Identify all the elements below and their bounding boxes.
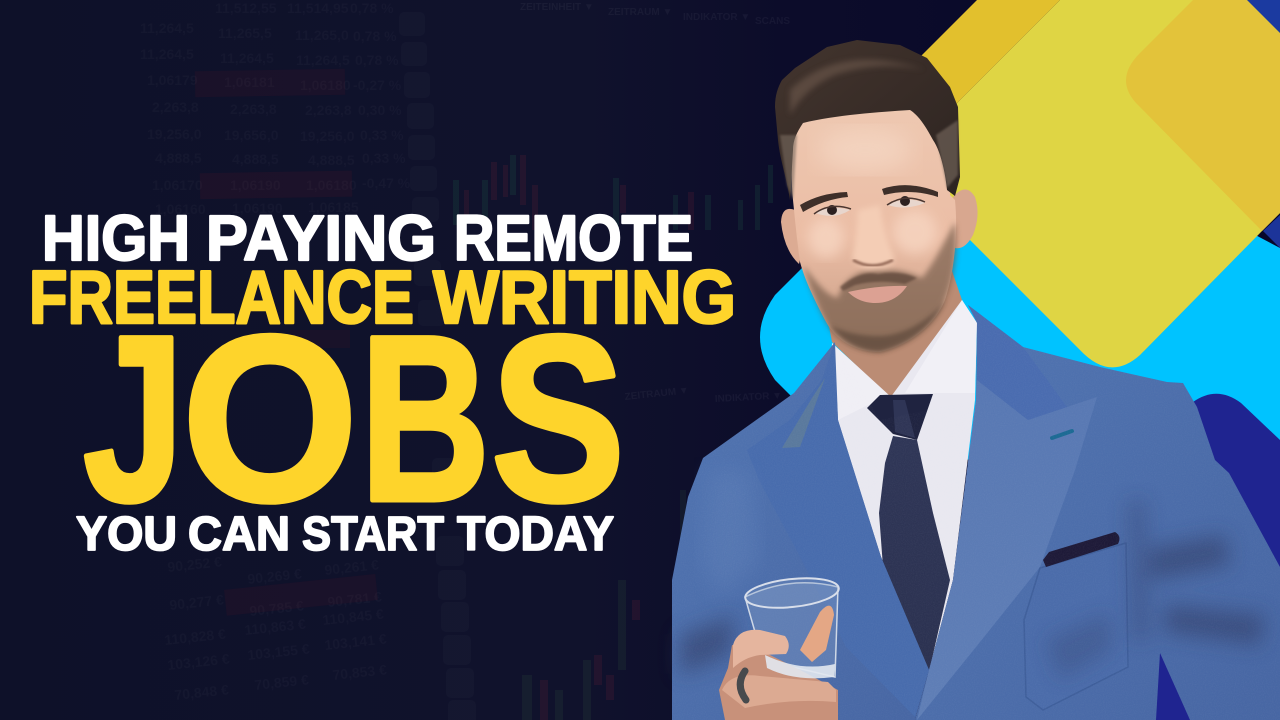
beard bbox=[803, 222, 956, 352]
right eye bbox=[887, 196, 925, 208]
mouth bbox=[848, 286, 907, 303]
left collar bbox=[782, 378, 825, 448]
heading line 1: HIGH bbox=[42, 202, 190, 274]
heading line 4: YOU bbox=[76, 508, 177, 561]
navy gap under arm bbox=[1156, 653, 1190, 720]
table numbers: 1,06160 bbox=[155, 201, 206, 217]
forehead highlight bbox=[817, 128, 913, 172]
table numbers: 110,863 € bbox=[244, 616, 307, 638]
table numbers: 103,126 € bbox=[167, 651, 230, 673]
table numbers: 11,264,5 bbox=[140, 46, 194, 62]
table numbers: 19,256,0 bbox=[147, 126, 202, 142]
table numbers: 1,06180 bbox=[300, 77, 351, 93]
left eye bbox=[814, 205, 851, 216]
glass base bbox=[765, 655, 835, 678]
table numbers: -0,27 % bbox=[353, 77, 402, 93]
glass and hand bbox=[719, 574, 840, 720]
heading line 1: REMOTE bbox=[454, 202, 693, 274]
man in blue suit bbox=[660, 40, 1280, 720]
shirt bbox=[830, 300, 977, 670]
chart tabs: ZEITEINHEIT ▼ bbox=[520, 2, 594, 13]
table numbers: 1,06185 bbox=[308, 199, 359, 215]
table highlight rows bbox=[195, 69, 378, 616]
heading line 4: START bbox=[302, 508, 444, 561]
table numbers: 90,252 € bbox=[167, 553, 223, 575]
left sleeve highlight bbox=[700, 470, 760, 600]
ring bbox=[740, 671, 746, 700]
heading line 3: B bbox=[360, 287, 490, 551]
table numbers: 11,264,5 bbox=[140, 20, 194, 36]
hair bbox=[775, 40, 960, 200]
table numbers: 90,277 € bbox=[169, 591, 225, 613]
lapel buttonhole bbox=[1052, 431, 1072, 438]
ear right bbox=[953, 190, 978, 248]
cheek highlights bbox=[808, 210, 937, 258]
table numbers: 11,265,5 bbox=[218, 25, 272, 41]
table numbers: 90,261 € bbox=[324, 556, 380, 578]
table numbers: 90,269 € bbox=[247, 565, 303, 587]
table numbers: 11,264,5 bbox=[220, 50, 274, 66]
table numbers: 0,33 % bbox=[362, 150, 406, 166]
table numbers: 0,78 % bbox=[353, 28, 397, 44]
hand bbox=[719, 606, 838, 720]
chart tabs: ZEITRAUM ▼ bbox=[624, 385, 689, 403]
table numbers: -0,47 % bbox=[362, 175, 411, 191]
chart tabs: ZEITRAUM ▼ bbox=[608, 7, 672, 18]
table numbers: 11,514,95 bbox=[287, 0, 349, 16]
heading line 3: O bbox=[182, 287, 358, 551]
table numbers: 11,512,55 bbox=[215, 0, 277, 16]
fabric shadows bbox=[680, 500, 1265, 680]
right collar bbox=[968, 305, 1067, 420]
table numbers: 103,155 € bbox=[247, 641, 310, 663]
table numbers: 2,263,8 bbox=[305, 102, 352, 118]
shape: yellow diamond bbox=[895, 0, 1280, 367]
table numbers: 1,06190 bbox=[232, 200, 283, 216]
table numbers: 1,06190 bbox=[230, 177, 281, 193]
table numbers: 110,845 € bbox=[322, 606, 385, 628]
lower finger bbox=[722, 675, 836, 708]
table numbers: 70,853 € bbox=[332, 661, 388, 683]
chest pocket bbox=[1024, 543, 1128, 710]
shape: navy top corner bbox=[1247, 0, 1280, 33]
table numbers: 11,265,0 bbox=[295, 27, 349, 43]
moustache bbox=[840, 273, 917, 291]
table numbers: 4,888,5 bbox=[308, 152, 355, 168]
shape: dark yellow band bbox=[812, 0, 1060, 165]
chart candles bbox=[453, 155, 773, 720]
table numbers: 1,06181 bbox=[224, 74, 275, 90]
table numbers: 1,06180 bbox=[306, 177, 357, 193]
chart tabs: INDIKATOR ▼ bbox=[715, 390, 782, 405]
shirt collar bbox=[832, 300, 977, 420]
ear left bbox=[781, 209, 805, 264]
table numbers: 4,888,5 bbox=[155, 150, 202, 166]
thumb bbox=[800, 606, 834, 662]
neck bbox=[826, 265, 962, 398]
heading line 2: WRITING bbox=[433, 255, 736, 339]
heading line 3: J bbox=[83, 287, 184, 551]
table numbers: 2,263,8 bbox=[230, 101, 277, 117]
decorative shapes bbox=[760, 0, 1280, 720]
right lapel bbox=[917, 380, 1097, 720]
shape: cyan blob bbox=[760, 100, 1280, 470]
table numbers: 103,141 € bbox=[324, 631, 387, 653]
fabric texture bbox=[874, 390, 1115, 630]
table numbers: 0,33 % bbox=[360, 127, 404, 143]
table numbers: 19,656,0 bbox=[224, 127, 279, 143]
pocket square bbox=[1043, 532, 1119, 567]
heading line 4: CAN bbox=[188, 508, 290, 561]
shape: navy small triangle bbox=[1263, 215, 1280, 248]
table numbers: 1,06170 bbox=[152, 177, 203, 193]
table numbers: 70,859 € bbox=[254, 671, 310, 693]
table numbers: 2,263,8 bbox=[152, 99, 199, 115]
left lapel bbox=[747, 344, 929, 717]
face bbox=[792, 95, 956, 352]
table numbers: 70,848 € bbox=[174, 681, 230, 703]
headline bbox=[29, 202, 736, 561]
index finger bbox=[733, 630, 789, 668]
heading line 1: PAYING bbox=[206, 202, 436, 274]
suit jacket bbox=[660, 300, 1280, 720]
nose bbox=[852, 205, 894, 269]
right eyebrow bbox=[882, 185, 938, 197]
table numbers: 90,781 € bbox=[327, 588, 383, 610]
chart tabs: SCANS bbox=[755, 16, 790, 27]
table numbers bbox=[140, 0, 411, 703]
table numbers: 90,785 € bbox=[249, 597, 305, 619]
table numbers: 0,78 % bbox=[355, 52, 399, 68]
table numbers: 1,06179 bbox=[147, 72, 198, 88]
table numbers: 0,30 % bbox=[358, 102, 402, 118]
chart tabs: INDIKATOR ▼ bbox=[683, 12, 750, 23]
left eyebrow bbox=[800, 192, 848, 212]
table numbers: 11,264,5 bbox=[296, 52, 350, 68]
heading line 4: TODAY bbox=[457, 508, 614, 561]
glass bbox=[744, 574, 840, 677]
chart toolbar bbox=[399, 12, 476, 720]
heading line 3: S bbox=[491, 287, 625, 551]
tie bbox=[867, 394, 950, 672]
shape: navy diamond bbox=[1100, 394, 1280, 720]
table numbers: 0,78 % bbox=[350, 0, 394, 16]
table numbers: 4,888,5 bbox=[232, 151, 279, 167]
table numbers: 110,828 € bbox=[164, 626, 227, 648]
shape: amber rounded square bbox=[1126, 0, 1280, 231]
chart tabs bbox=[520, 2, 790, 405]
heading line 2: FREELANCE bbox=[29, 255, 414, 339]
table numbers: 19,256,0 bbox=[300, 128, 355, 144]
head bbox=[775, 40, 978, 352]
